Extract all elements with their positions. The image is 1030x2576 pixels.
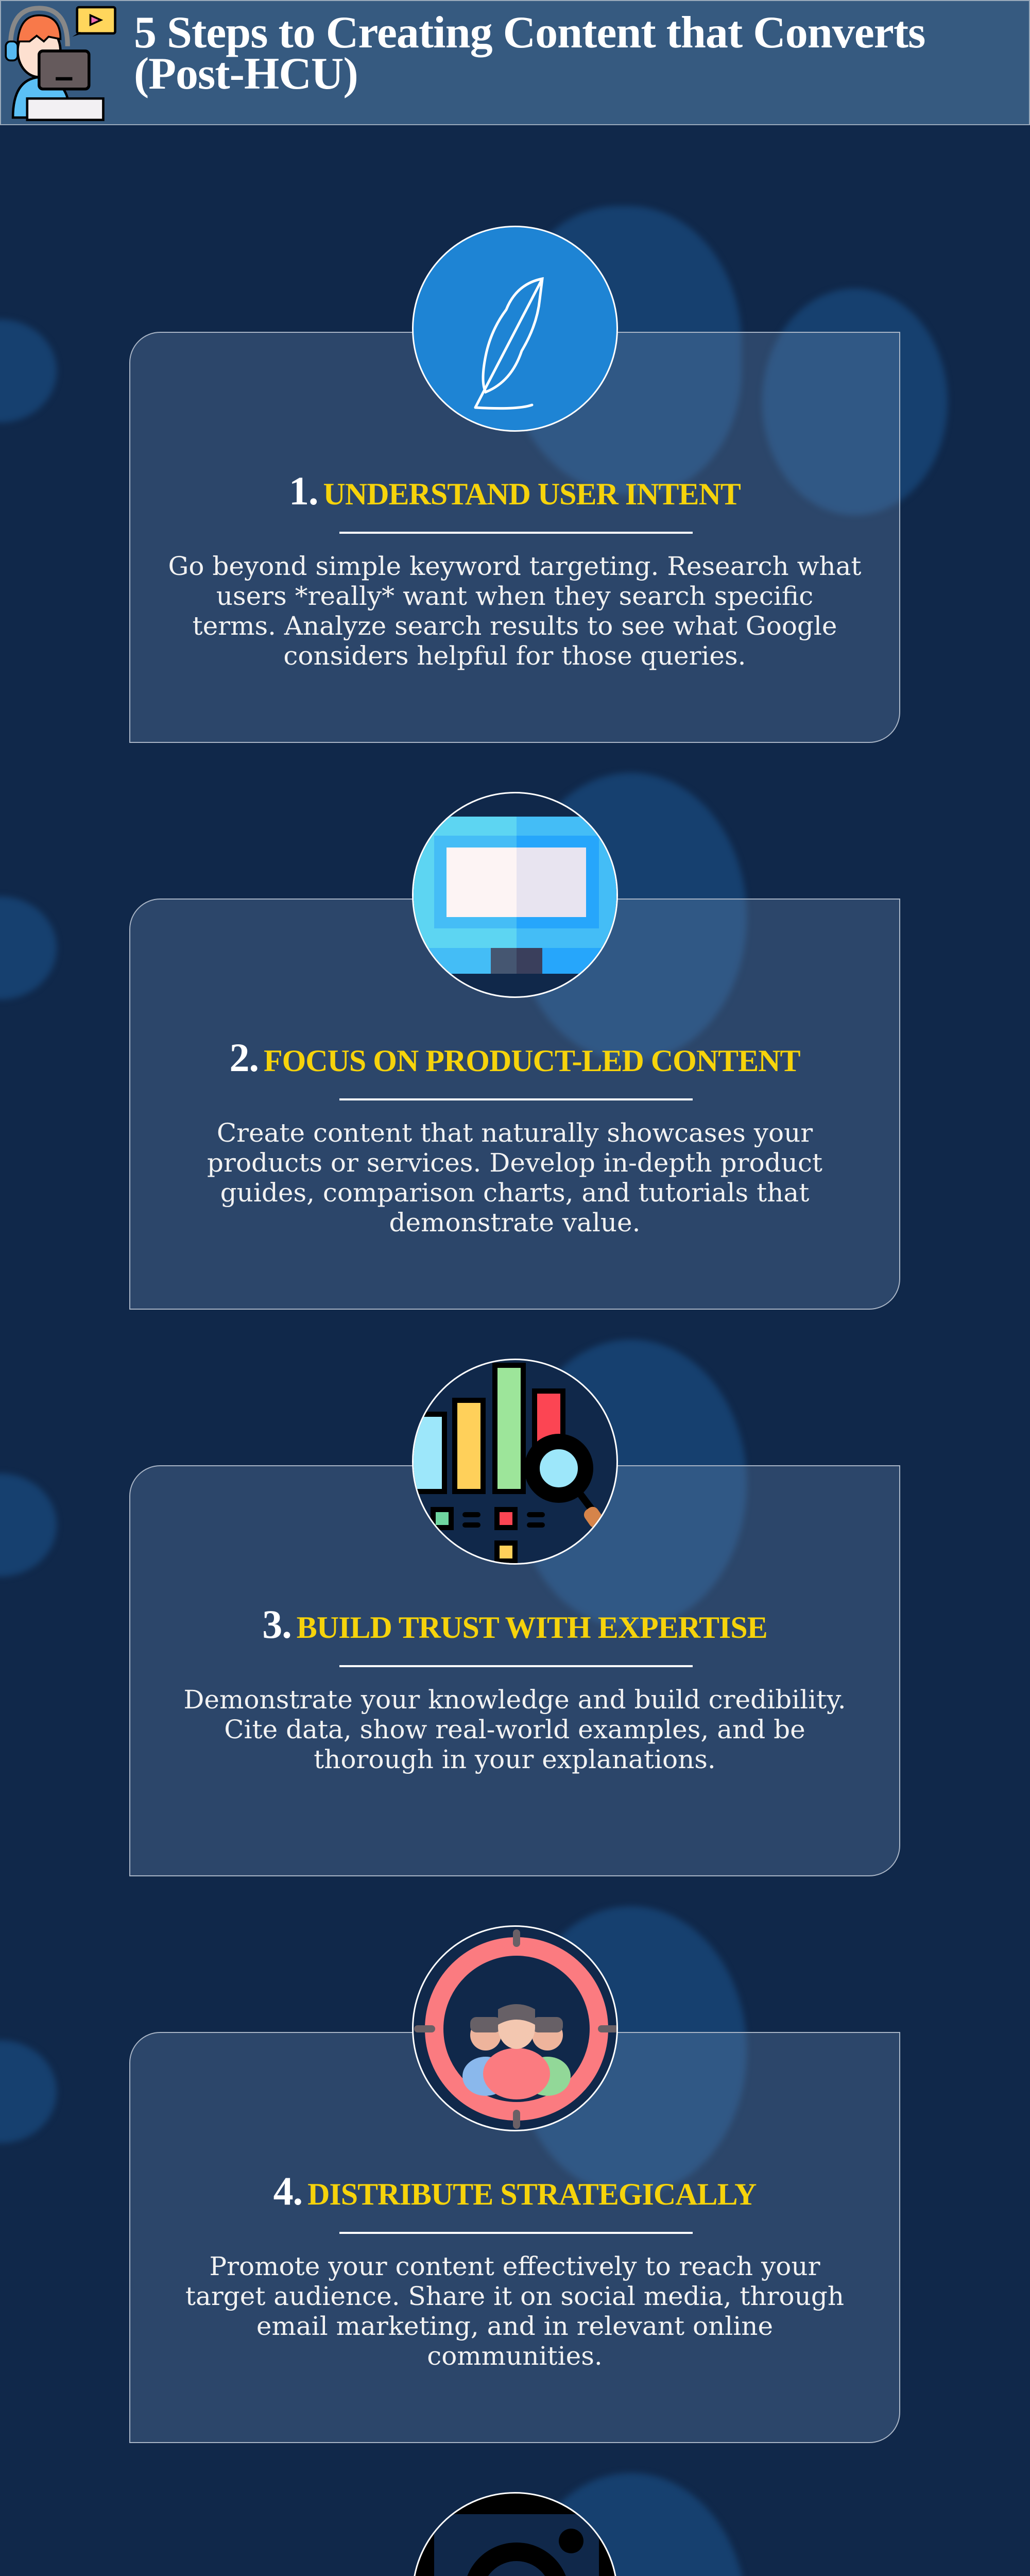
panel: step 2 xyxy=(129,899,900,1310)
heading 4: 4.DISTRIBUTE STRATEGICALLY xyxy=(273,2168,756,2213)
icon: instagram xyxy=(412,2492,618,2576)
icon: target audience xyxy=(412,1925,618,2131)
text 2 xyxy=(207,1118,822,1238)
icon: monitor xyxy=(412,792,618,998)
text 1 xyxy=(168,551,862,671)
header xyxy=(0,0,1030,125)
panel: step 1 xyxy=(129,332,900,743)
title: (Post-HCU) xyxy=(134,49,358,99)
text 1: users *really* want when they search specific xyxy=(216,581,813,611)
text 3: Demonstrate your knowledge and build credibility. xyxy=(183,1685,846,1715)
heading 3: 3.BUILD TRUST WITH EXPERTISE xyxy=(262,1602,767,1647)
text 3: Cite data, show real-world examples, and be xyxy=(224,1715,805,1744)
panel: step 4 xyxy=(129,2032,900,2443)
text 3 xyxy=(183,1685,846,1774)
text 4: communities. xyxy=(427,2341,603,2371)
text 2: products or services. Develop in-depth product xyxy=(207,1148,822,1178)
title: 5 Steps to Creating Content that Converts xyxy=(134,8,925,58)
text 4: target audience. Share it on social media, through xyxy=(185,2281,844,2311)
text 4: Promote your content effectively to reach your xyxy=(210,2251,820,2281)
text 2: guides, comparison charts, and tutorials that xyxy=(220,1178,809,1208)
icon: feather xyxy=(412,226,618,432)
text 1: considers helpful for those queries. xyxy=(283,641,746,671)
text 1: terms. Analyze search results to see what Google xyxy=(192,611,837,641)
text 4 xyxy=(185,2251,844,2371)
icon: person at computer xyxy=(5,6,116,122)
panel: step 3 xyxy=(129,1465,900,1876)
title xyxy=(134,8,925,99)
text 2: demonstrate value. xyxy=(389,1208,641,1238)
heading 2: 2.FOCUS ON PRODUCT-LED CONTENT xyxy=(229,1035,800,1080)
icon: chart with magnifier xyxy=(412,1359,618,1565)
text 2: Create content that naturally showcases your xyxy=(217,1118,813,1148)
text 4: email marketing, and in relevant online xyxy=(256,2311,773,2341)
text 1: Go beyond simple keyword targeting. Research what xyxy=(168,551,862,581)
heading 1: 1.UNDERSTAND USER INTENT xyxy=(289,468,741,513)
text 3: thorough in your explanations. xyxy=(314,1744,716,1774)
